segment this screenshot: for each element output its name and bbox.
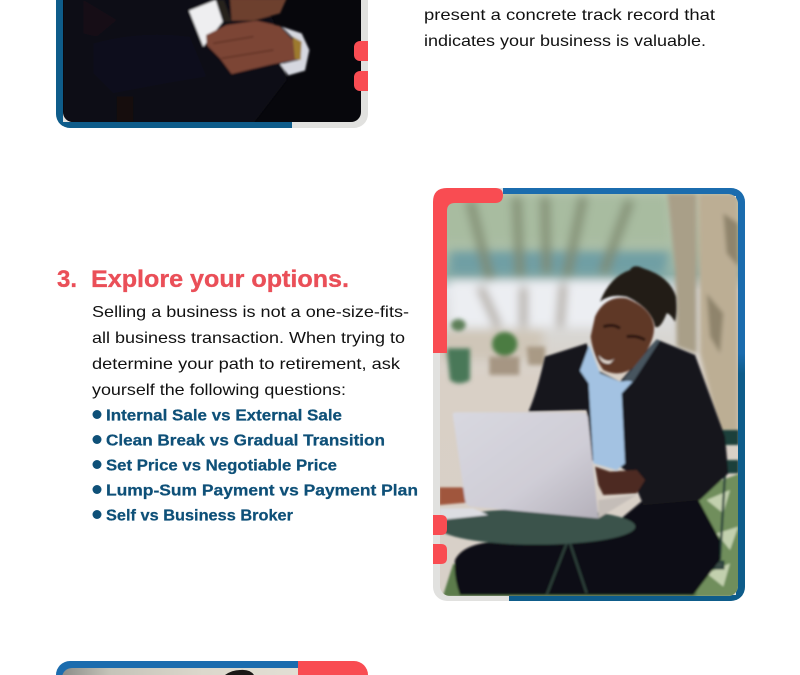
body paragraph <box>92 304 409 399</box>
middle photo card <box>433 188 745 601</box>
jacket <box>528 339 728 505</box>
text: track record continuation <box>424 7 716 50</box>
card frame <box>56 661 368 675</box>
text: track record continuation: present a concrete track record that <box>424 7 716 24</box>
trousers <box>455 497 720 595</box>
greenery <box>443 473 740 597</box>
bullet list <box>92 408 418 524</box>
red tab bottom <box>354 71 374 91</box>
section 3 text <box>57 266 418 524</box>
body paragraph: Selling a business is not a one-size-fits- <box>92 304 409 321</box>
red accent bracket <box>433 188 503 353</box>
table <box>438 509 635 545</box>
photo: cropped portrait <box>62 668 298 675</box>
typing hands <box>595 467 645 495</box>
heading number: 3. <box>57 266 77 293</box>
bullet list: Internal Sale vs External Sale <box>106 408 342 424</box>
body paragraph: yourself the following questions: <box>92 382 346 399</box>
laptop <box>453 412 598 518</box>
body paragraph: all business transaction. When trying to <box>92 330 405 347</box>
card frame <box>433 188 745 601</box>
photo: man on phone at laptop <box>438 193 740 597</box>
notebook and glasses <box>439 508 488 519</box>
bullet list: Set Price vs Negotiable Price <box>106 458 337 474</box>
chair <box>720 430 739 473</box>
photo: businessman adjusting cuff <box>63 0 361 123</box>
shirt <box>580 345 634 470</box>
red tab top <box>354 41 374 61</box>
card frame <box>56 0 368 128</box>
top photo card <box>56 0 378 128</box>
heading: Explore your options. <box>91 266 349 293</box>
text: track record continuation: indicates your business is valuable. <box>424 33 706 50</box>
bullet list: Lump-Sum Payment vs Payment Plan <box>106 482 418 500</box>
body paragraph: determine your path to retirement, ask <box>92 356 401 373</box>
bottom photo card <box>56 661 368 675</box>
red tab bottom <box>433 544 447 564</box>
table leg <box>547 543 587 595</box>
bullet list: Self vs Business Broker <box>106 508 293 524</box>
red tab top <box>433 515 447 535</box>
hair <box>600 266 676 327</box>
neck and face <box>591 298 654 373</box>
bullet list: Clean Break vs Gradual Transition <box>106 432 385 450</box>
